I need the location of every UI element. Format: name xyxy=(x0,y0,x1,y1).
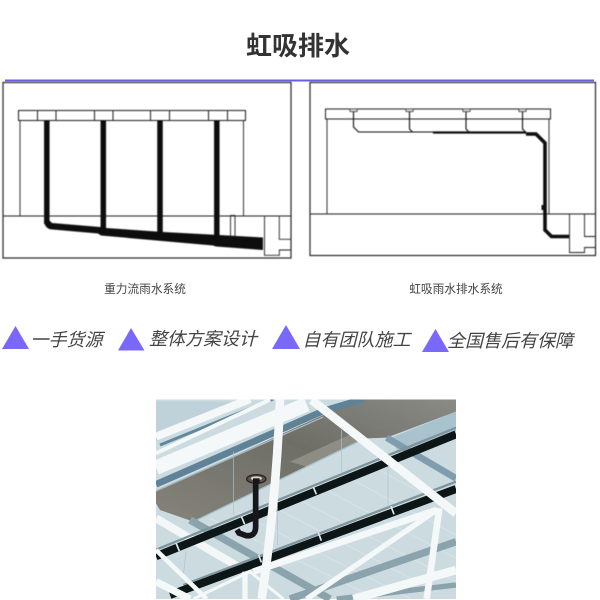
corrugated roof background xyxy=(156,399,456,599)
vertical drain pipes xyxy=(47,120,217,240)
grey purlins xyxy=(190,438,456,599)
outlet chamber xyxy=(570,214,595,252)
roof drains xyxy=(350,109,526,112)
feature: own construction team xyxy=(272,325,412,350)
pipe clamps xyxy=(176,487,394,562)
diagram: gravity rainwater system xyxy=(3,82,291,258)
feature: overall plan design: 整体方案设计 xyxy=(149,329,259,349)
purple divider xyxy=(5,80,594,82)
cable trays above pipes xyxy=(156,428,456,585)
feature: own construction team: 自有团队施工 xyxy=(302,330,412,350)
feature: after-sales guarantee: 全国售后有保障 xyxy=(447,331,575,351)
title: 虹吸排水 xyxy=(246,31,350,61)
siphonic main pipe xyxy=(433,131,526,134)
black pipes xyxy=(156,434,456,595)
white truss tubes xyxy=(156,399,456,599)
feature: first-hand supply: 一手货源 xyxy=(30,330,105,350)
feature: overall plan design xyxy=(118,328,259,350)
lower-left white truss tube behind pipes xyxy=(156,518,247,572)
icon: triangle xyxy=(422,329,449,352)
feature: first-hand supply xyxy=(2,326,105,350)
siphon drain and U-trap xyxy=(237,480,256,536)
caption: siphonic system: 虹吸雨水排水系统 xyxy=(409,282,503,296)
caption: gravity system: 重力流雨水系统 xyxy=(104,282,186,296)
thin branch pipes xyxy=(354,111,526,133)
sloped main pipe xyxy=(44,220,263,250)
steel beam underside xyxy=(156,399,456,522)
icon: triangle xyxy=(272,325,300,349)
icon: triangle xyxy=(118,328,144,350)
roof slab xyxy=(18,110,246,120)
outlet chamber xyxy=(264,216,291,255)
hanger rods xyxy=(183,430,388,582)
icon: triangle xyxy=(2,326,29,349)
frame xyxy=(3,82,291,258)
blue steel bands along beam xyxy=(156,399,365,522)
walls and ground xyxy=(3,120,291,216)
photo: siphonic pipes under a steel-truss roof xyxy=(156,399,456,600)
walls and ground xyxy=(310,119,595,214)
diagram: siphonic rainwater system xyxy=(310,82,596,256)
small riser xyxy=(230,216,235,236)
frame xyxy=(310,82,596,256)
roof slab xyxy=(326,109,550,119)
